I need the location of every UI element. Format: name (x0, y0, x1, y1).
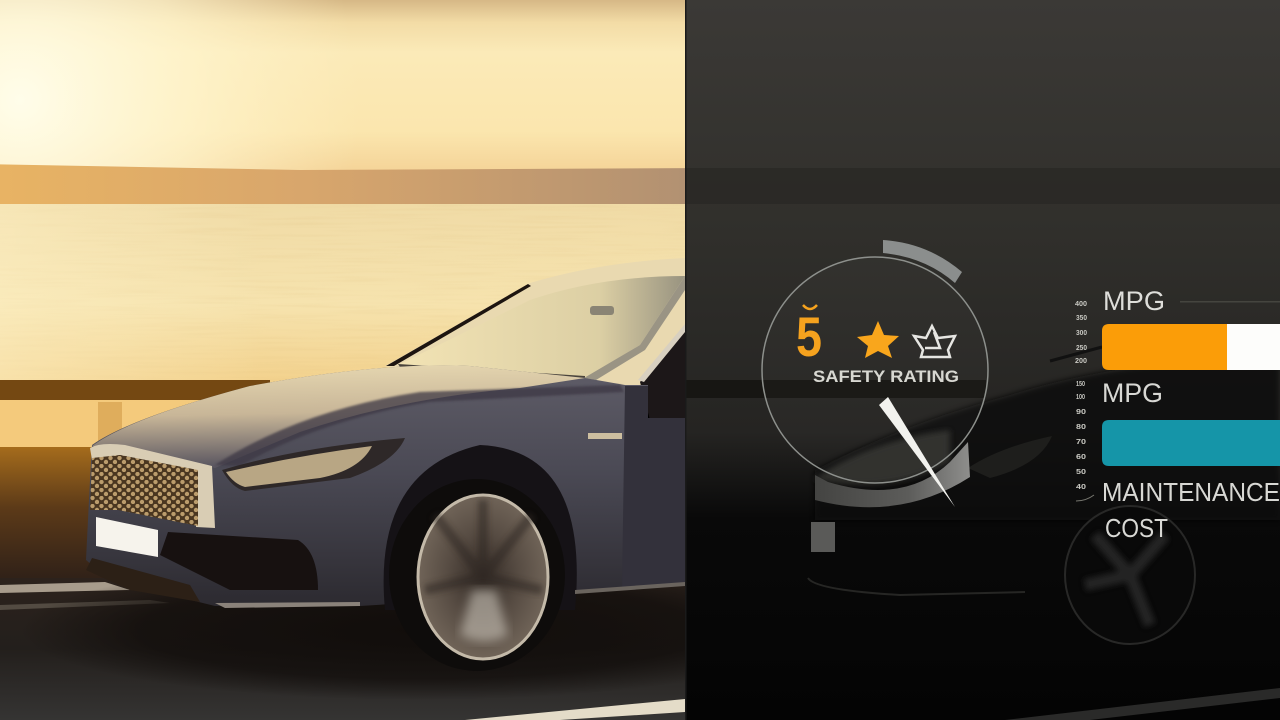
label: MPG: MPG (1103, 286, 1165, 316)
sunset sky (0, 0, 685, 170)
tick scale: 80 (1076, 424, 1086, 431)
rear-view mirror (590, 306, 614, 315)
bumper trim (215, 602, 360, 608)
road markings (0, 582, 170, 610)
tick scale: 60 (1076, 454, 1086, 461)
wheel arch (384, 445, 577, 610)
tick scale: 90 (1076, 409, 1086, 416)
label: maintenance cost: COST (1105, 513, 1168, 543)
licence plate (96, 517, 158, 557)
panel: dark data overlay (686, 0, 1280, 720)
dark background (686, 0, 1280, 720)
hood crease (215, 385, 624, 466)
windshield lower edge (398, 364, 585, 379)
alloy rim (418, 495, 548, 659)
rating caption: SAFETY RATING (813, 367, 959, 386)
bar: teal (1102, 420, 1280, 466)
dimmed bumper line (808, 578, 1025, 595)
filled star (857, 321, 899, 358)
tick scale: 100 (1076, 394, 1085, 401)
sea (0, 204, 685, 404)
front air intake (160, 532, 318, 590)
tick scale: 250 (1076, 345, 1087, 352)
roadside bank (0, 447, 104, 578)
panel divider (685, 0, 686, 720)
wheel spokes (425, 500, 542, 590)
dimmed wheel (1065, 506, 1195, 644)
wheel highlight (460, 590, 508, 642)
label: MPG second: MPG (1102, 378, 1163, 408)
dimmed horizon band (686, 168, 1280, 204)
gauge needle (879, 397, 955, 507)
tick scale: 350 (1076, 315, 1087, 322)
dimmed licence plate (811, 522, 835, 552)
dimmed roof line (1050, 347, 1102, 361)
upper gauge arc (883, 240, 962, 283)
dimmed hood highlight (815, 430, 950, 485)
gauge ring (762, 257, 988, 483)
lower grille (86, 558, 200, 602)
rating number accent (803, 305, 817, 309)
dimmed road marking (1005, 688, 1280, 720)
headlight (222, 438, 405, 491)
tick scale (1075, 301, 1087, 491)
tick scale: 150 (1076, 381, 1085, 388)
door panel (623, 386, 685, 542)
tick scale: 70 (1076, 439, 1086, 446)
chrome pillar (584, 276, 685, 380)
bar: MPG orange and white (1102, 324, 1280, 370)
panel: sunset photo with car (0, 0, 685, 720)
dimmed headlight (968, 436, 1052, 478)
rating gauge (762, 240, 988, 507)
road edge stripe (465, 699, 685, 720)
tyre (389, 479, 565, 671)
dimmed guard rail (686, 380, 986, 398)
tick scale: 50 (1076, 469, 1086, 476)
door window (640, 328, 685, 420)
rating number: 5 (796, 305, 822, 368)
lower gauge arc (815, 442, 970, 507)
car cabin and roof (386, 258, 685, 385)
tick scale: 300 (1076, 330, 1087, 337)
car ground shadow (66, 586, 685, 692)
car body (86, 365, 685, 606)
lower water glow (0, 400, 200, 448)
road (0, 578, 685, 720)
grille frame (90, 444, 215, 528)
label rule (1180, 301, 1280, 302)
dimmed car silhouette (808, 347, 1280, 644)
door highlight (588, 433, 622, 439)
windshield pillar line (386, 284, 531, 366)
tick scale: 200 (1075, 358, 1087, 365)
tick scale: 40 (1076, 484, 1086, 491)
tick scale: 400 (1075, 301, 1087, 308)
label: maintenance cost (1102, 477, 1280, 543)
outline star (914, 326, 955, 357)
hood (92, 365, 585, 468)
horizon cloud band (0, 164, 705, 204)
car (86, 258, 685, 671)
windshield (400, 276, 685, 378)
scale end curve (1076, 495, 1094, 501)
sill (575, 582, 685, 594)
grille mesh (90, 455, 198, 526)
chrome window strip (638, 324, 685, 382)
guard rail (0, 380, 270, 400)
